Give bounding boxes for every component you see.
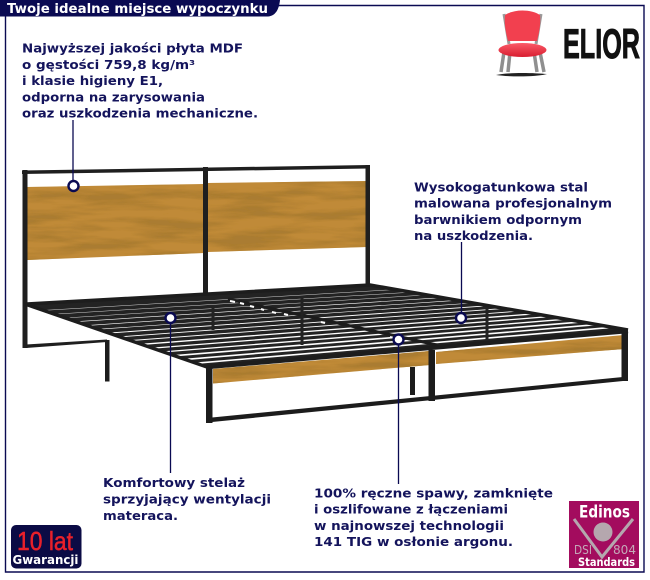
callout: welds: 100% ręczne spawy, zamknięte	[314, 486, 553, 500]
leader line and marker	[456, 242, 466, 323]
badge: 10 year warranty	[11, 525, 82, 568]
badge: Edinos standards: Edinos	[579, 502, 630, 522]
callout: steel: na uszkodzenia.	[414, 228, 533, 243]
headboard wood panels	[27, 181, 367, 260]
callout: ventilated frame: sprzyjający wentylacji	[103, 492, 271, 506]
callout: MDF board: oraz uszkodzenia mechaniczne.	[22, 106, 258, 120]
lower wood strips	[213, 335, 624, 384]
callout: welds	[314, 334, 553, 549]
callout: welds: i oszlifowane z łączeniami	[314, 502, 508, 516]
badge: Edinos standards: 804	[613, 543, 636, 557]
title banner: Twoje idealne miejsce wypoczynku	[7, 2, 268, 17]
platform side rails	[25, 285, 628, 367]
centre spine	[228, 299, 437, 345]
bed illustration	[22, 165, 628, 423]
badge: Edinos standards: DSI	[574, 543, 592, 557]
headboard frame	[22, 165, 370, 348]
callout: MDF board: i klasie higieny E1,	[22, 73, 163, 88]
icon: red chair	[496, 10, 547, 76]
callout: steel: barwnikiem odpornym	[414, 212, 582, 227]
leader line and marker	[166, 313, 176, 473]
callout: MDF board	[22, 40, 258, 191]
callout: steel: Wysokogatunkowa stal	[414, 180, 588, 194]
badge: Edinos standards	[569, 501, 639, 569]
callout: steel: malowana profesjonalnym	[414, 196, 612, 211]
legs and lower frame	[105, 330, 628, 423]
callout: welds: w najnowszej technologii	[314, 518, 504, 533]
slatted platform	[27, 285, 628, 368]
badge: 10 year warranty: 10 lat	[17, 526, 74, 556]
callout: MDF board: odporna na zarysowania	[22, 89, 205, 104]
callout: MDF board: o gęstości 759,8 kg/m³	[22, 57, 195, 72]
leader line and marker	[394, 334, 404, 484]
callout: MDF board: Najwyższej jakości płyta MDF	[22, 40, 243, 56]
callout: ventilated frame: materaca.	[103, 508, 178, 523]
leader line and marker	[68, 120, 78, 191]
badge: 10 year warranty: Gwarancji	[12, 552, 78, 567]
callout: steel	[414, 180, 612, 323]
badge: Edinos standards: Standards	[578, 555, 635, 569]
callout: welds: 141 TIG w osłonie argonu.	[314, 534, 513, 549]
callout: ventilated frame: Komfortowy stelaż	[103, 475, 245, 490]
callout: ventilated frame	[103, 313, 271, 523]
logo: Elior chair	[496, 10, 640, 76]
